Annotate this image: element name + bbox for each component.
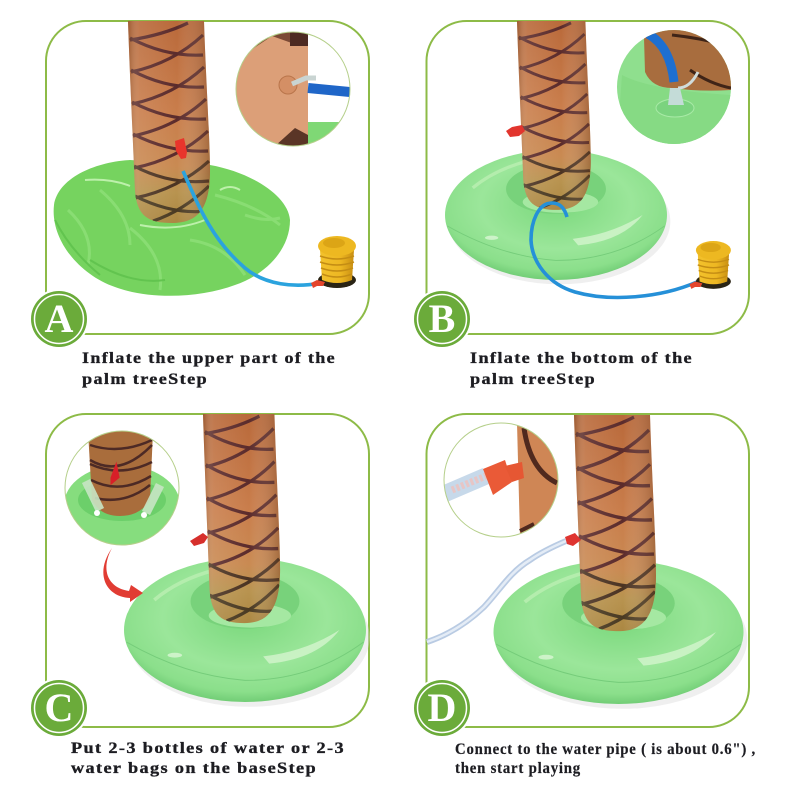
panel B frame [426, 21, 749, 334]
foot pump [311, 236, 356, 288]
red valve [190, 533, 208, 546]
step badge A: A [45, 296, 74, 341]
panel D frame [426, 414, 749, 727]
foot pump [689, 241, 731, 289]
panel A: inflate upper part [29, 21, 369, 388]
palm trunk [203, 414, 280, 623]
palm trunk [128, 21, 210, 223]
inflated ring [445, 150, 670, 284]
inflated ring [124, 558, 370, 707]
step badge B [412, 289, 472, 349]
inflated ring [494, 560, 747, 709]
curved red arrow [103, 548, 143, 602]
panel A frame [46, 21, 369, 334]
inset: ring valve detail [617, 30, 731, 144]
inset: bottles on base [64, 431, 180, 545]
caption A: palm treeStep [82, 371, 208, 388]
base mat deflated [54, 160, 290, 296]
panel C: add water bottles [29, 414, 370, 777]
panel C frame [46, 414, 369, 727]
caption C: Put 2-3 bottles of water or 2-3 [71, 740, 345, 757]
panel B: inflate bottom [412, 21, 749, 388]
caption B: palm treeStep [470, 371, 596, 388]
step badge C: C [45, 685, 73, 730]
caption C: water bags on the baseStep [71, 760, 317, 777]
red connector [565, 533, 581, 546]
step badge C [29, 678, 89, 738]
step badge D: D [428, 685, 456, 730]
panel D: connect water pipe [412, 414, 756, 777]
caption D: Connect to the water pipe ( is about 0.6") , [455, 741, 756, 758]
red valve [506, 125, 525, 137]
step badge B: B [429, 296, 455, 341]
step badge D [412, 678, 472, 738]
caption A: Inflate the upper part of the [82, 350, 336, 367]
step badge A [29, 289, 89, 349]
caption B: Inflate the bottom of the [470, 350, 693, 367]
water hose [427, 541, 566, 642]
palm trunk [517, 21, 591, 210]
red valve [175, 138, 187, 159]
air hose [183, 171, 320, 285]
air hose [531, 203, 697, 297]
palm trunk [574, 415, 656, 631]
inset: hose connector detail [444, 423, 558, 537]
inset: valve detail [236, 30, 350, 148]
caption D: then start playing [455, 760, 581, 777]
